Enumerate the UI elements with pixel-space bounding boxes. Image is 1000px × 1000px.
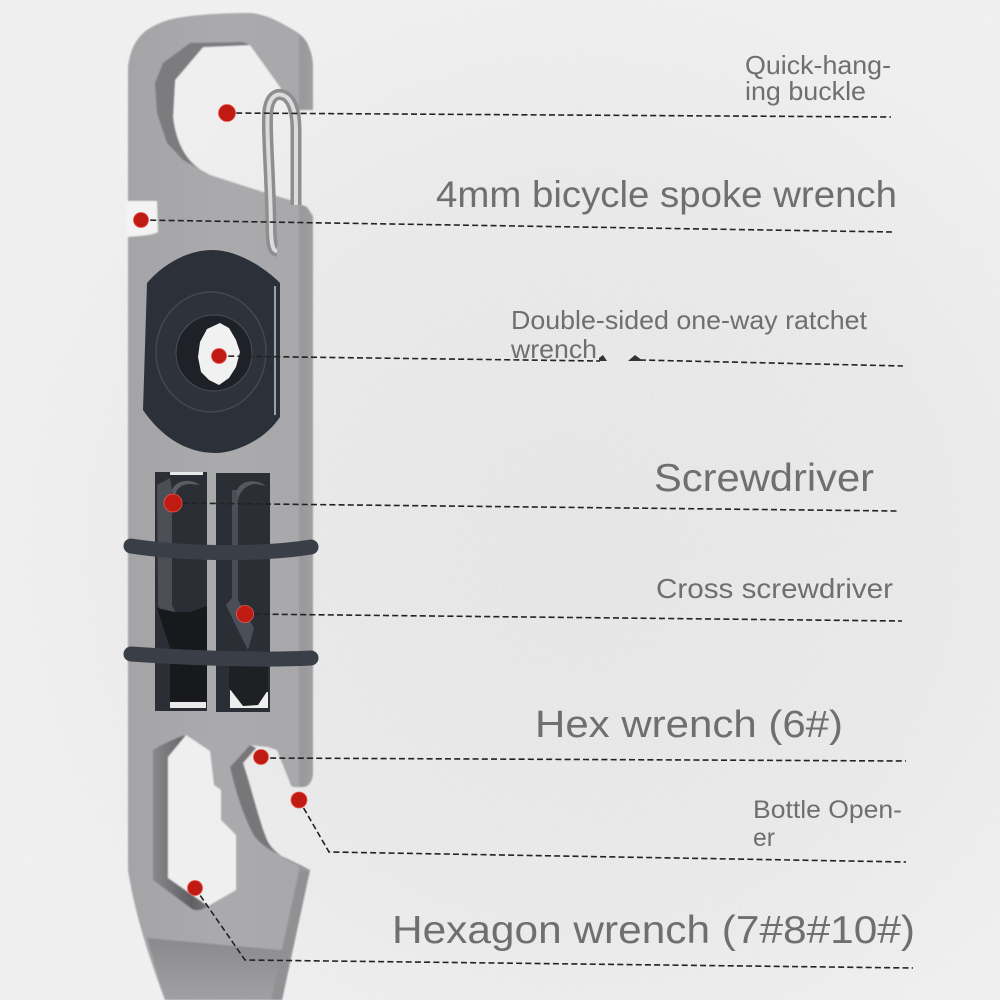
opener bevel [230,745,307,869]
rubber bands [131,546,311,659]
label: quick-hanging buckle [745,50,891,106]
label: hexagon wrench: Hexagon wrench (7#8#10#) [392,909,915,952]
label: ratchet wrench: Double-sided one-way ratchet [511,305,868,335]
right edge bevel [271,870,310,1000]
label: screwdriver: Screwdriver [654,457,874,500]
screwdriver bits [155,472,270,712]
cross bit [216,473,270,712]
label: quick-hanging buckle: Quick-hang- [745,50,891,80]
label: cross screwdriver: Cross screwdriver [656,573,893,604]
callout dots [134,104,307,896]
hole bevel [153,735,208,910]
label: ratchet wrench [510,305,868,364]
ratchet hole [198,323,240,385]
label: bottle opener: er [753,824,775,852]
ratchet ring [156,292,266,412]
label: spoke wrench: 4mm bicycle spoke wrench [436,174,897,215]
label: ratchet wrench: wrench [510,334,597,364]
ratchet wrench [143,250,280,453]
hook inner bevel [155,42,250,175]
label: quick-hanging buckle: ing buckle [745,76,866,106]
steel outline [128,13,313,1000]
flat bit [155,472,207,711]
label: hex wrench: Hex wrench (6#) [535,704,843,746]
line artifacts [599,355,643,361]
notch: 4mm spoke wrench [126,201,158,237]
label: bottle opener: Bottle Open- [753,796,902,824]
multi-tool body [126,13,313,1000]
hexagon wrench hole [168,735,236,906]
carabiner loop [267,95,296,251]
label: bottle opener [753,796,902,852]
callout leader lines [141,113,913,968]
tip facet [147,938,292,1000]
